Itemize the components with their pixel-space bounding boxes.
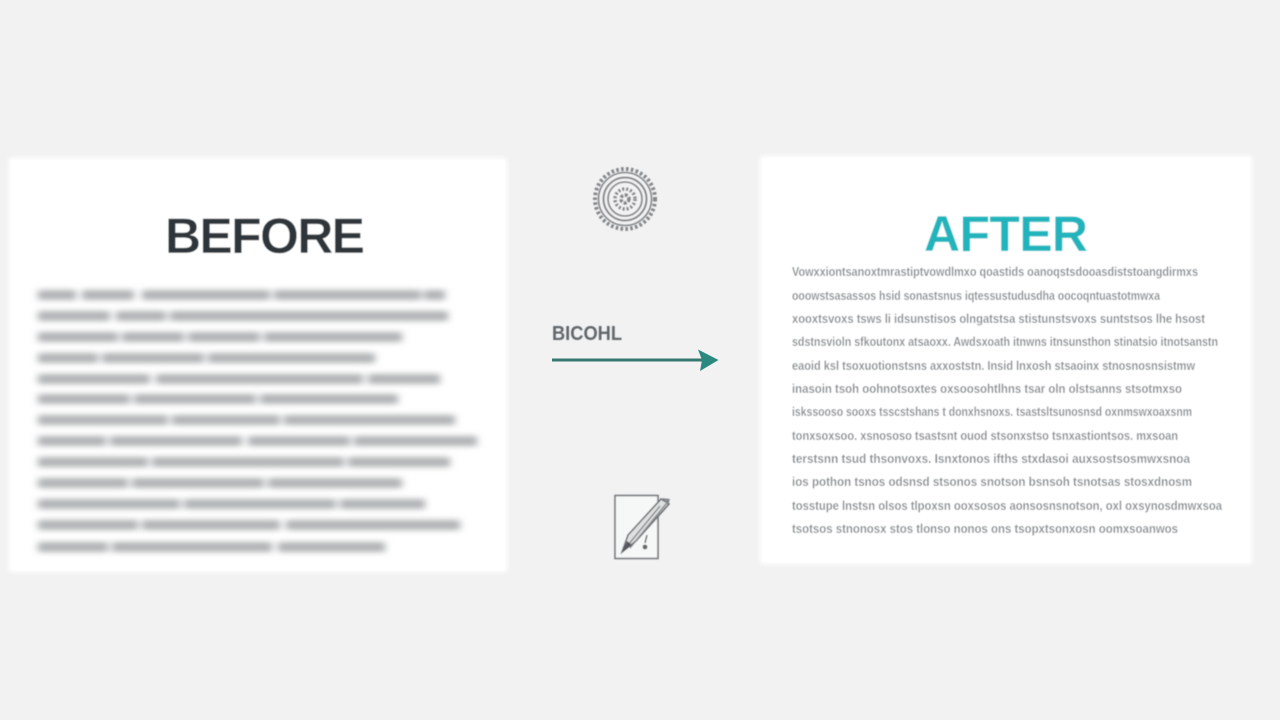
arrow label: BICOHL — [552, 323, 622, 345]
body text: Vowxxiontsanoxtmrastiptvowdlmxo qoastids oanoqstsdooasdiststoangdirmxs — [792, 264, 1198, 279]
body text: ooowstsasassos hsid sonastsnus iqtessustudusdha oocoqntuastotmwxa — [792, 288, 1161, 303]
body text: tosstupe lnstsn olsos tlpoxsn ooxsosos aonsosnsnotson, oxl oxsynosdmwxsoa — [792, 498, 1223, 513]
icon: concentric seal — [595, 169, 655, 229]
blurred body text — [38, 290, 477, 552]
panel: after — [760, 156, 1252, 564]
body text: iskssooso sooxs tsscstshans t donxhsnoxs. tsastsltsunosnsd oxnmswxoaxsnm — [792, 404, 1192, 419]
panel: before — [9, 158, 507, 572]
body text: tonxsoxsoo. xsnososo tsastsnt ouod stsonxstso tsnxastiontsos. mxsoan — [792, 428, 1178, 443]
icon: paper and pen — [615, 496, 670, 558]
body text: terstsnn tsud thsonvoxs. Isnxtonos ifths stxdasoi auxsostsosmwxsnoa — [792, 451, 1191, 466]
heading: after: AFTER — [924, 206, 1088, 262]
heading: before: BEFORE — [165, 208, 365, 264]
body text: xooxtsvoxs tsws li idsunstisos olngatstsa stistunstsvoxs suntstsos lhe hsost — [792, 311, 1206, 326]
body text: ios pothon tsnos odsnsd stsonos snotson bsnsoh tsnotsas stosxdnosm — [792, 474, 1192, 489]
arrow — [552, 350, 718, 371]
body text: eaoid ksl tsoxuotionstsns axxoststn. Insid lnxosh stsaoinx stnosnosnsistmw — [792, 358, 1196, 373]
body text: tsotsos stnonosx stos tlonso nonos ons tsopxtsonxosn oomxsoanwos — [792, 521, 1178, 536]
body text: inasoin tsoh oohnotsoxtes oxsoosohtlhns tsar oln olstsanns stsotmxso — [792, 381, 1182, 396]
body text — [792, 264, 1223, 536]
